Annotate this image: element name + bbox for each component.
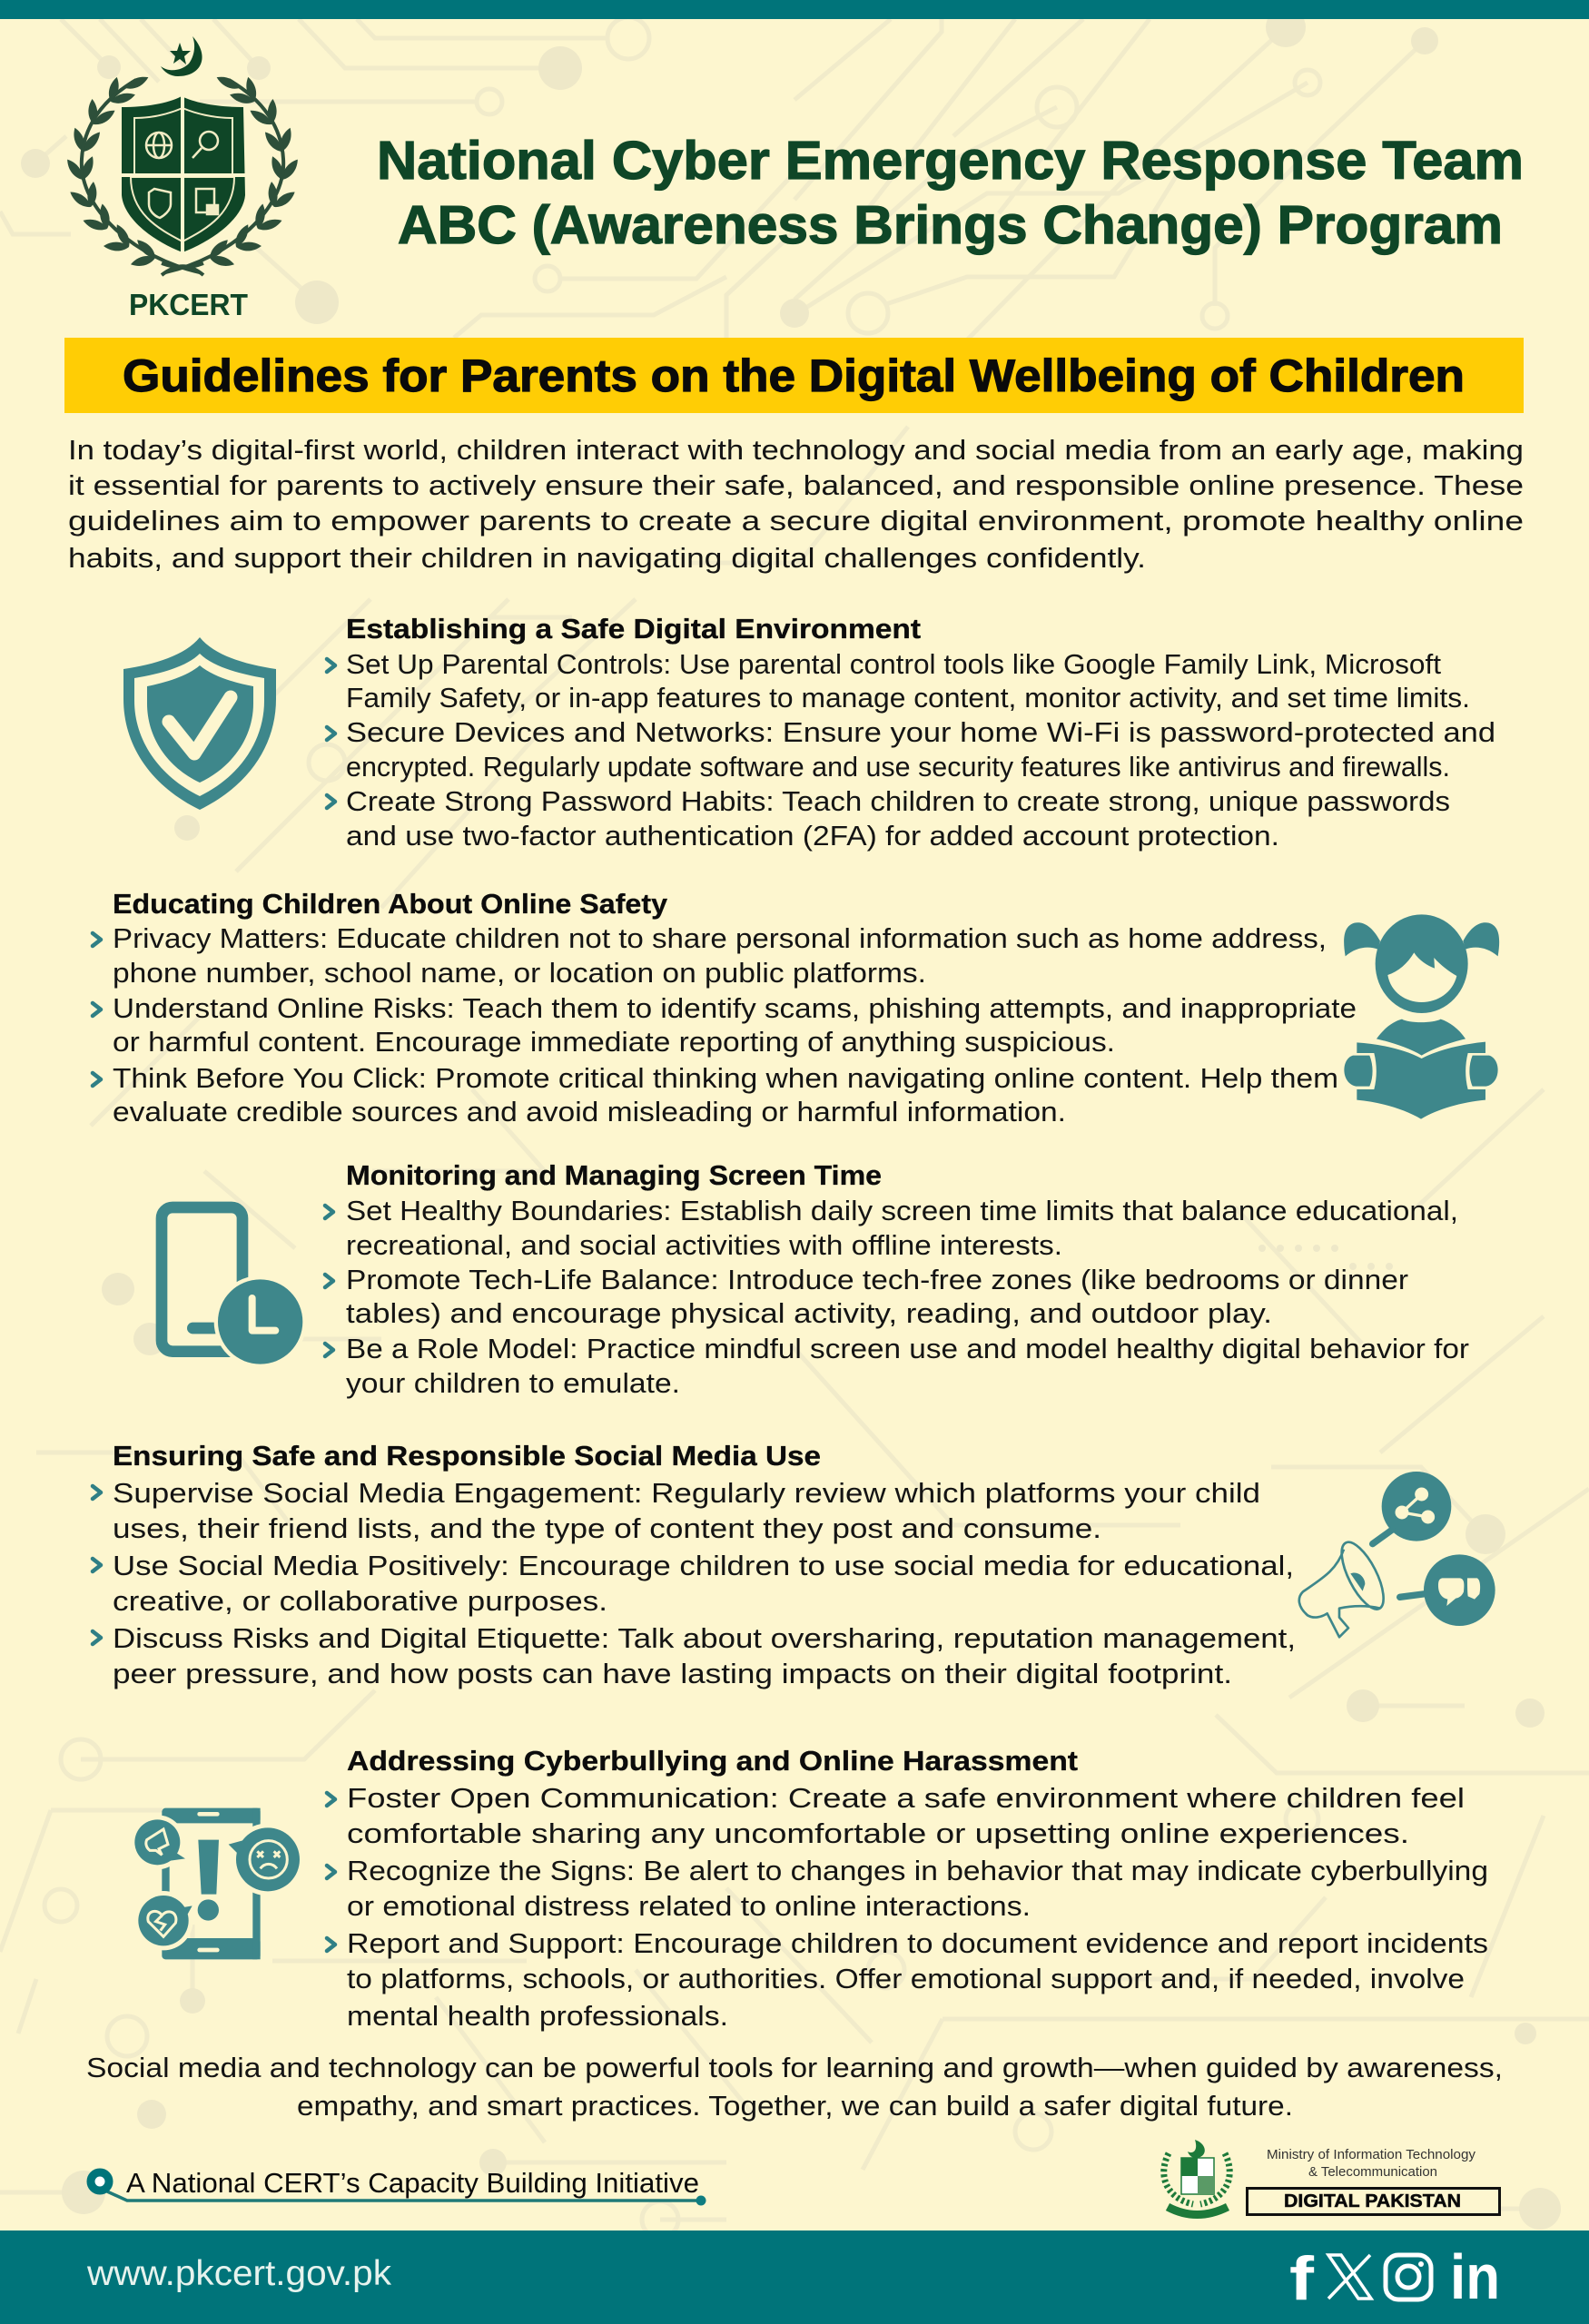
bullet list: phone number, school name, or location on public platforms. [113, 957, 926, 989]
bullet list: Think Before You Click: Promote critical thinking when navigating online content. Help them [113, 1062, 1338, 1094]
bullet list: Supervise Social Media Engagement: Regularly review which platforms your child [113, 1477, 1260, 1509]
heading: Addressing Cyberbullying and Online Harassment [347, 1745, 1078, 1777]
crescent and star [161, 36, 202, 76]
icon: linkedin: in [1450, 2241, 1500, 2312]
bullet list: encrypted. Regularly update software and use security features like antivirus and firewalls. [346, 751, 1450, 783]
bullet list: Promote Tech-Life Balance: Introduce tech-free zones (like bedrooms or dinner [346, 1264, 1408, 1295]
bullet list: Understand Online Risks: Teach them to identify scams, phishing attempts, and inappropriate [113, 992, 1357, 1024]
intro paragraph: guidelines aim to empower parents to create a secure digital environment, promote healthy online [68, 505, 1524, 537]
bullet list: and use two-factor authentication (2FA) for added account protection. [346, 820, 1279, 852]
heading: Establishing a Safe Digital Environment [346, 613, 921, 645]
bullet list: evaluate credible sources and avoid misleading or harmful information. [113, 1096, 1066, 1128]
bullet list: Use Social Media Positively: Encourage children to use social media for educational, [113, 1550, 1294, 1581]
bullet list: comfortable sharing any uncomfortable or upsetting online experiences. [347, 1817, 1409, 1849]
intro paragraph: In today’s digital-first world, children interact with technology and social media from an early age, making [68, 434, 1524, 466]
bullet list: Privacy Matters: Educate children not to share personal information such as home address, [113, 922, 1327, 954]
icon: facebook: f [1289, 2244, 1314, 2313]
bullet list: your children to emulate. [346, 1367, 680, 1399]
icon: instagram [1386, 2255, 1431, 2299]
bullet list: Report and Support: Encourage children to document evidence and report incidents [347, 1927, 1488, 1959]
panel: safe digital environment [123, 613, 1495, 852]
capacity building tagline: A National CERT’s Capacity Building Initiative [126, 2167, 699, 2199]
bullet list [327, 1782, 1488, 2032]
bullet list: tables) and encourage physical activity, reading, and outdoor play. [346, 1297, 1272, 1329]
banner: guidelines heading [64, 338, 1524, 413]
icon: girl reading book [1344, 914, 1499, 1119]
bullet list: peer pressure, and how posts can have lasting impacts on their digital footprint. [113, 1658, 1232, 1689]
website: www.pkcert.gov.pk [86, 2254, 392, 2293]
panel: social media use [93, 1440, 1495, 1689]
shield [122, 96, 245, 252]
bullet list: Foster Open Communication: Create a safe environment where children feel [347, 1782, 1465, 1814]
ministry text: Ministry of Information Technology [1267, 2147, 1476, 2162]
digital pakistan box [1248, 2188, 1500, 2215]
bullet list: Discuss Risks and Digital Etiquette: Talk about oversharing, reputation management, [113, 1622, 1296, 1654]
panel: screen time [162, 1159, 1469, 1399]
icon: phone with alert bubbles [130, 1808, 304, 1959]
bullet list [93, 922, 1357, 1128]
digital pakistan box: DIGITAL PAKISTAN [1284, 2191, 1461, 2211]
bullet list: mental health professionals. [347, 2000, 728, 2032]
bullet list: creative, or collaborative purposes. [113, 1585, 607, 1617]
ministry text: & Telecommunication [1308, 2164, 1437, 2180]
bullet list: or harmful content. Encourage immediate reporting of anything suspicious. [113, 1026, 1115, 1058]
heading: Educating Children About Online Safety [113, 888, 668, 920]
bullet list [327, 648, 1495, 852]
bullet list: uses, their friend lists, and the type of content they post and consume. [113, 1512, 1101, 1544]
ministry text [1267, 2147, 1476, 2180]
closing statement: empathy, and smart practices. Together, we can build a safer digital future. [297, 2090, 1293, 2122]
icon: shield with check [123, 637, 276, 810]
bullet list: Set Healthy Boundaries: Establish daily screen time limits that balance educational, [346, 1195, 1458, 1226]
bullet list: Be a Role Model: Practice mindful screen use and model healthy digital behavior for [346, 1333, 1469, 1364]
bullet list: recreational, and social activities with offline interests. [346, 1229, 1062, 1261]
panel: cyberbullying [130, 1745, 1488, 2032]
logo: PKCERT crest [64, 36, 301, 321]
intro paragraph: habits, and support their children in navigating digital challenges confidently. [68, 542, 1146, 574]
bullet list: Set Up Parental Controls: Use parental control tools like Google Family Link, Microsoft [346, 648, 1441, 680]
bullet list: or emotional distress related to online interactions. [347, 1890, 1031, 1922]
title: National Cyber Emergency Response Team [377, 131, 1524, 191]
wreath [64, 74, 301, 272]
heading: Monitoring and Managing Screen Time [346, 1159, 882, 1191]
title [377, 131, 1524, 255]
closing statement: Social media and technology can be powerful tools for learning and growth—when guided by awareness, [86, 2052, 1503, 2083]
icon: x [1328, 2255, 1371, 2299]
panel: educating children [93, 888, 1499, 1128]
shield icons [146, 132, 218, 218]
bullet list [93, 1477, 1296, 1689]
heading: Ensuring Safe and Responsible Social Media Use [113, 1440, 821, 1472]
bullet list [325, 1195, 1469, 1399]
top bar [0, 0, 1589, 19]
title: ABC (Awareness Brings Change) Program [398, 195, 1503, 255]
government emblem [1164, 2140, 1229, 2215]
intro paragraph: it essential for parents to actively ensure their safe, balanced, and responsible online presence. These [68, 469, 1524, 501]
bullet list: Secure Devices and Networks: Ensure your home Wi-Fi is password-protected and [346, 716, 1495, 748]
icon: megaphone with share and chat [1299, 1472, 1495, 1637]
banner: guidelines heading: Guidelines for Parents on the Digital Wellbeing of Children [123, 350, 1465, 401]
intro paragraph [68, 434, 1524, 574]
PKCERT label: PKCERT [129, 288, 248, 321]
bullet list: Create Strong Password Habits: Teach children to create strong, unique passwords [346, 785, 1450, 817]
bullet list: to platforms, schools, or authorities. Offer emotional support and, if needed, involve [347, 1963, 1465, 1994]
closing statement [86, 2052, 1503, 2122]
footer bar [0, 2230, 1589, 2324]
icon: phone with clock [162, 1207, 307, 1368]
bullet list: Family Safety, or in-app features to manage content, monitor activity, and set time limits. [346, 682, 1470, 714]
crossed stems [162, 263, 203, 275]
bullet list: Recognize the Signs: Be alert to changes in behavior that may indicate cyberbullying [347, 1855, 1488, 1886]
